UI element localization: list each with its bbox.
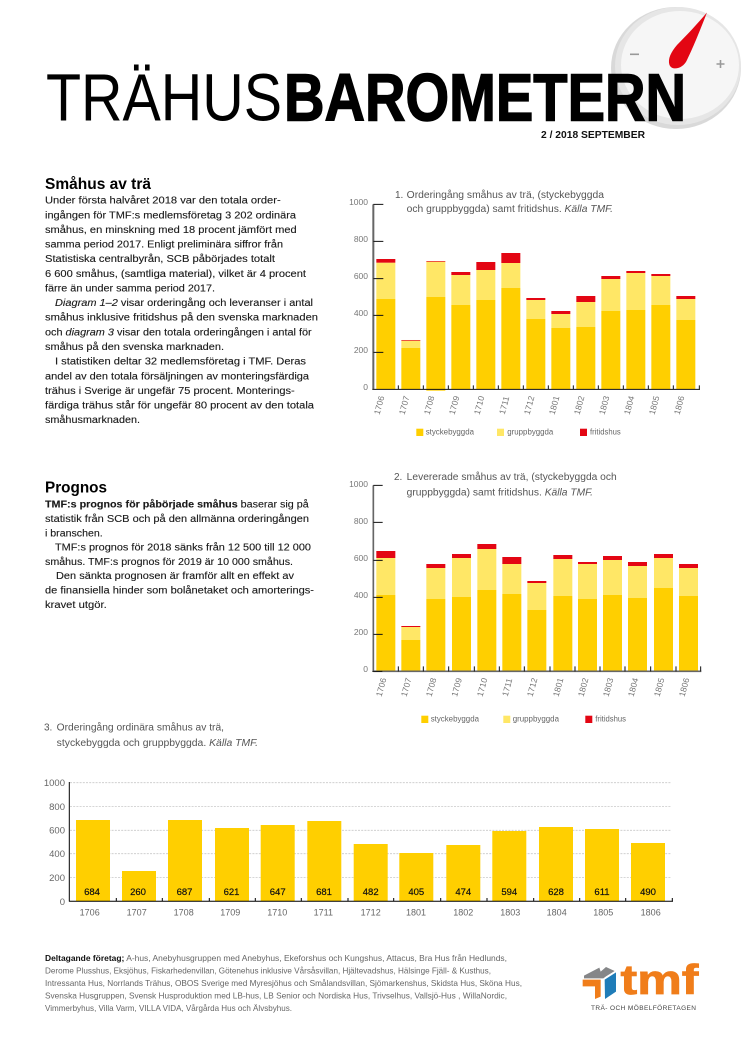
chart 3 x axis labels: 1712	[361, 908, 381, 918]
text block: Prognos: TMF:s prognos för påbörjade småhus baserar sig på	[45, 499, 309, 511]
text block: Prognos: statistik från SCB och på den allmänna orderingången	[45, 513, 309, 525]
chart 3 bar values: 647	[270, 887, 286, 898]
chart 2 legend: gruppbyggda	[513, 715, 560, 724]
text block: Småhus av trä: småhus inklusive fritidshus på den svenska marknaden	[45, 312, 318, 324]
chart 2 x axis labels: 1805	[652, 677, 666, 698]
chart 2 legend	[421, 715, 626, 724]
footer: participating companies: Intressanta Hus, Norrlands Trähus, OBOS Sverige med Myresjöhus och Smålandsvillan, Sjömarkenshus, Skidsta Hus, Sköna Hus,	[45, 978, 522, 988]
chart 2 x axis labels: 1803	[601, 677, 615, 698]
chart 3 bar values: 687	[177, 887, 192, 898]
chart 1 legend	[416, 428, 621, 437]
chart 1 title: Orderingång småhus av trä, (styckebyggda	[407, 189, 604, 201]
chart 3 y axis labels: 800	[49, 802, 65, 813]
chart 1 x axis labels	[372, 395, 686, 416]
chart 3 bar values: 260	[130, 887, 146, 898]
chart 1 y axis labels: 600	[354, 271, 368, 281]
chart 2 y axis labels: 600	[354, 553, 368, 563]
chart 3 x axis labels: 1706	[80, 908, 100, 918]
chart 2 y axis labels: 800	[354, 516, 368, 526]
text block: Småhus av trä: småhus, en minskning med 18 procent jämfört med	[45, 224, 297, 236]
chart 3 title: Orderingång ordinära småhus av trä,	[57, 722, 224, 734]
issue date: 2 / 2018 SEPTEMBER	[541, 130, 646, 141]
chart 3 bar values: 405	[408, 887, 424, 898]
text block: Småhus av trä: 6 600 småhus, (samtliga material), vilket är 4 procent	[45, 268, 306, 280]
chart 2 x axis labels: 1806	[677, 677, 691, 698]
chart 1 x axis labels: 1806	[672, 395, 686, 416]
chart 2 y axis labels: 0	[363, 664, 368, 674]
text block: Småhus av trä: och diagram 3 visar den totala orderingången i antal för	[45, 326, 312, 338]
text block: Prognos: småhus. TMF:s prognos för 2019 är 10 000 småhus.	[45, 556, 293, 568]
chart 3 title: styckebyggda och gruppbyggda. Källa TMF.	[57, 738, 258, 749]
chart 3 bar values: 594	[501, 887, 517, 898]
text block: Småhus av trä: trähus i Sverige är ungefär 75 procent. Monterings-	[45, 386, 295, 397]
title	[46, 60, 686, 136]
chart 2 title	[394, 471, 617, 499]
text block: Prognos: Den sänkta prognosen är framför allt en effekt av	[56, 571, 294, 582]
chart 3 bar values: 621	[224, 887, 239, 898]
chart 3 x axis labels: 1708	[174, 908, 194, 918]
chart 3 y axis labels	[44, 778, 65, 908]
chart 1 y axis labels: 400	[354, 308, 368, 318]
chart 2 y axis labels	[349, 479, 368, 674]
chart 3 bar values: 684	[84, 887, 100, 898]
chart 3 x axis labels	[80, 908, 661, 918]
chart 1 x axis labels: 1805	[647, 395, 661, 416]
title: TRÄHUS	[46, 60, 282, 136]
chart 1 y axis labels: 1000	[349, 197, 368, 207]
chart 2 y axis labels: 1000	[349, 479, 368, 489]
text block: Småhus av trä: samma period 2017. Enligt preliminära siffror från	[45, 239, 283, 251]
text block: Prognos: i branschen.	[45, 528, 103, 539]
chart 1 legend: styckebyggda	[426, 428, 475, 437]
footer: participating companies: Derome Plusshus, Eksjöhus, Fiskarhedenvillan, Götenehus inklusive Vårsåsvillan, Hjältevadshus, Hälsinge Fjäll- & Kusthus,	[45, 966, 491, 976]
chart 2 title: 2.	[394, 472, 402, 483]
chart 2 title: Levererade småhus av trä, (styckebyggda och	[407, 471, 617, 483]
chart 2 x axis labels	[374, 677, 691, 698]
chart 3 bars	[76, 820, 665, 901]
chart 1 x axis labels: 1801	[547, 395, 561, 416]
chart 3 bar values: 490	[640, 887, 656, 898]
chart 3 x axis labels: 1806	[641, 908, 661, 918]
chart 1 x axis labels: 1711	[497, 395, 511, 415]
chart 2 y axis labels: 400	[354, 590, 368, 600]
chart 3 bar values: 628	[548, 887, 564, 898]
chart 1 x axis labels: 1708	[422, 395, 436, 416]
chart 2 x axis labels: 1707	[399, 677, 413, 698]
text block: Småhus av trä: färre än under samma period 2017.	[45, 284, 215, 294]
chart 2 x axis labels: 1804	[626, 677, 640, 698]
text block: Prognos: TMF:s prognos för 2018 sänks från 12 500 till 12 000	[55, 542, 311, 554]
chart 2: levererade småhus	[349, 471, 701, 724]
icon: barometer dial	[611, 7, 741, 129]
chart 3 bar values: 611	[594, 887, 610, 898]
chart 3 x axis labels: 1805	[593, 908, 613, 918]
chart 3 x axis labels: 1803	[500, 908, 520, 918]
chart 3 bar values: 681	[316, 887, 332, 898]
chart 2 title: gruppbyggda) samt fritidshus. Källa TMF.	[407, 488, 593, 499]
text block: Småhus av trä: andel av den totala försäljningen av monteringsfärdiga	[45, 371, 309, 382]
text block: Småhus av trä: småhus på den svenska marknaden.	[45, 341, 224, 353]
text block: Prognos: de finansiella hinder som bolånetaket och amorterings-	[45, 584, 314, 596]
chart 1 x axis labels: 1802	[572, 395, 586, 416]
chart 3 y axis labels: 400	[49, 849, 65, 860]
text block: Småhus av trä: ingången för TMF:s medlemsföretag 3 202 ordinära	[45, 209, 296, 221]
chart 1 x axis labels: 1712	[522, 395, 536, 416]
chart 3 y axis labels: 600	[49, 826, 65, 836]
chart 2 x axis labels: 1709	[449, 677, 464, 698]
chart 2 legend: styckebyggda	[431, 715, 480, 724]
footer: participating companies	[45, 953, 522, 1013]
chart 3 x axis labels: 1802	[453, 908, 473, 918]
chart 2 x axis labels: 1802	[576, 677, 590, 698]
chart 3 bar values: 482	[363, 887, 379, 898]
chart 3 title: 3.	[44, 723, 52, 734]
logo tagline: TRÄ- OCH MÖBELFÖRETAGEN	[591, 1004, 696, 1012]
chart 2 x axis labels: 1711	[500, 677, 514, 697]
text block: Prognos: kravet utgör.	[45, 600, 107, 611]
text block: Småhus av trä: Under första halvåret 2018 var den totala order-	[45, 195, 281, 207]
chart 1 legend: gruppbyggda	[507, 428, 554, 437]
logo wordmark: tmf	[620, 956, 700, 1003]
footer: participating companies: Svenska Husgruppen, Svensk Husproduktion med LB-hus, LB Senior och Nordiska Hus, Trivselhus, Vallsjö-Hus , WillaNordic,	[45, 990, 507, 1000]
chart 1 bars	[372, 204, 700, 391]
chart 1 title	[395, 189, 613, 215]
chart 3 y axis labels: 0	[60, 897, 65, 908]
chart 1 x axis labels: 1803	[597, 395, 611, 416]
chart 3 x axis labels: 1804	[547, 908, 567, 918]
chart 1 x axis labels: 1709	[447, 395, 461, 416]
chart 1 y axis labels: 0	[363, 382, 368, 392]
chart 3: orderingång ordinära småhus	[44, 722, 673, 918]
text block: Småhus av trä: färdiga trähus står för ungefär 80 procent av den totala	[45, 400, 314, 412]
chart 3 bar values	[84, 887, 656, 898]
chart 3 x axis labels: 1710	[267, 908, 287, 918]
chart 1 title: 1.	[395, 190, 403, 201]
chart 3 y axis labels: 1000	[44, 778, 65, 789]
text block: Småhus av trä: småhusmarknaden.	[45, 414, 140, 426]
chart 1 x axis labels: 1707	[397, 395, 411, 416]
chart 2 legend: fritidshus	[595, 715, 626, 724]
chart 2 x axis labels: 1710	[475, 677, 489, 698]
chart 1 y axis labels: 800	[354, 234, 368, 244]
chart 2 x axis labels: 1706	[374, 677, 388, 698]
chart 3 x axis labels: 1707	[127, 908, 147, 918]
text block: Småhus av trä: Statistiska centralbyrån, SCB påbörjades totalt	[45, 253, 275, 265]
heading: Småhus av trä: Småhus av trä	[45, 175, 151, 193]
chart 3 x axis labels: 1709	[220, 908, 240, 918]
chart 3 x axis labels: 1801	[406, 908, 426, 918]
icon: tmf house mark	[583, 967, 616, 999]
text block: Prognos	[45, 499, 314, 611]
chart 1 y axis labels: 200	[354, 345, 368, 355]
text block: Småhus av trä: Diagram 1–2 visar orderingång och leveranser i antal	[55, 297, 313, 309]
chart 1 legend: fritidshus	[590, 428, 621, 437]
chart 1 x axis labels: 1804	[622, 395, 636, 416]
chart 1: orderingång småhus	[349, 189, 700, 437]
chart 3 x axis labels: 1711	[314, 908, 333, 918]
chart 1 y axis labels	[349, 197, 368, 392]
chart 3 y axis labels: 200	[49, 873, 65, 884]
chart 1 x axis labels: 1706	[372, 395, 386, 416]
chart 2 x axis labels: 1712	[525, 677, 539, 698]
chart 1 title: och gruppbyggda) samt fritidshus. Källa TMF.	[407, 204, 613, 215]
text block: Småhus av trä: I statistiken deltar 32 medlemsföretag i TMF. Deras	[55, 357, 306, 368]
chart 3 bar values: 474	[455, 887, 471, 898]
text block: Småhus av trä	[45, 195, 318, 426]
logo: tmf	[583, 956, 700, 1012]
chart 2 x axis labels: 1708	[424, 677, 438, 698]
chart 1 x axis labels: 1710	[472, 395, 486, 416]
footer: participating companies: Deltagande företag; A-hus, Anebyhusgruppen med Anebyhus, Ekeforshus och Kungshus, Attacus, Bra Hus från Hedlunds,	[45, 953, 507, 963]
heading: Prognos: Prognos	[45, 480, 107, 497]
chart 2 y axis labels: 200	[354, 627, 368, 637]
chart 2 x axis labels: 1801	[551, 677, 565, 698]
chart 2 bars	[372, 485, 701, 671]
chart 3 title	[44, 722, 258, 749]
footer: participating companies: Vimmerbyhus, Villa Varm, VILLA VIDA, Vårgårda Hus och Älvsbyhus.	[45, 1003, 292, 1013]
